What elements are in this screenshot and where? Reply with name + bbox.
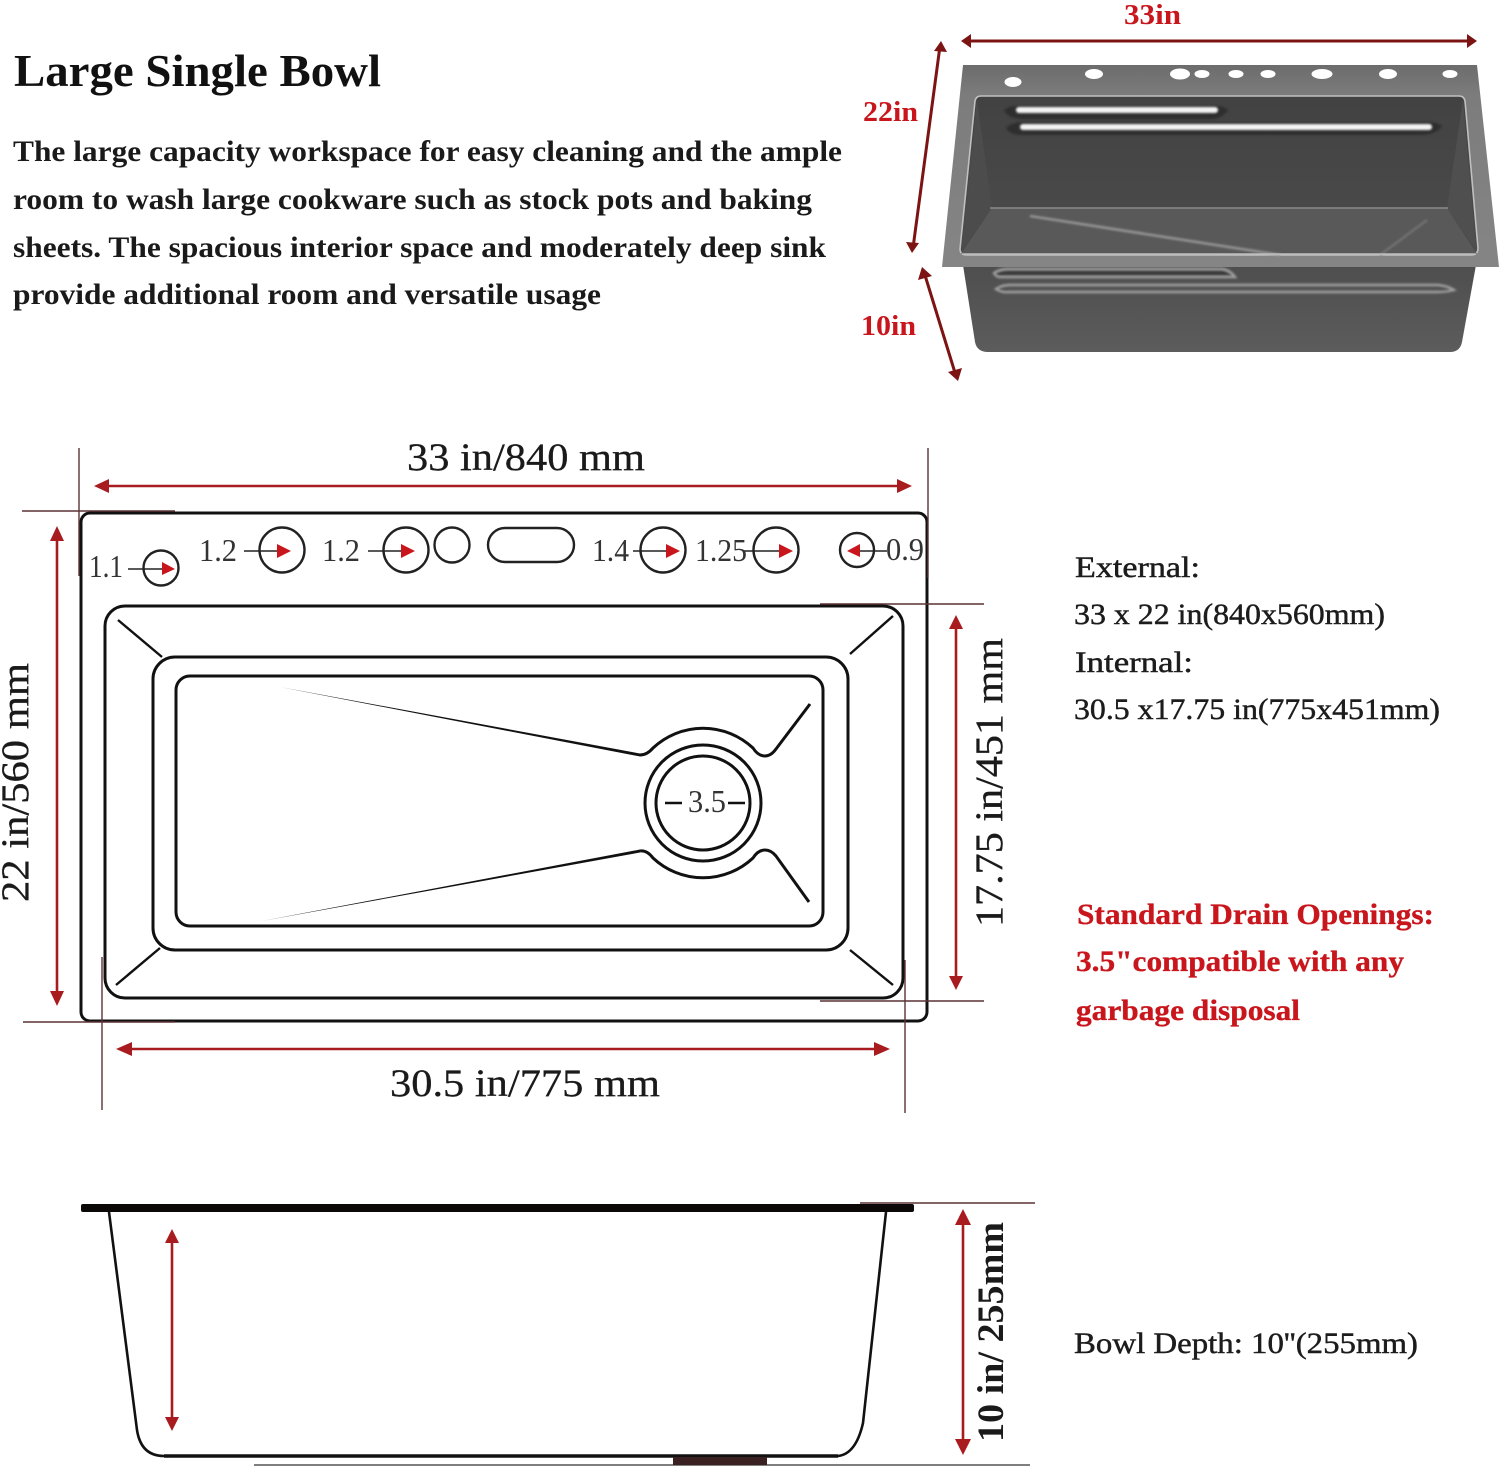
rim bowl outline [105, 606, 903, 998]
drain circles [645, 745, 761, 861]
arrow: inner depth [165, 1229, 179, 1431]
text block: external and internal size [1074, 551, 1440, 726]
top flange [81, 1204, 914, 1212]
sink outer body [963, 265, 1476, 352]
text block: description [13, 135, 842, 311]
text block: drain openings: Standard Drain Openings: [1077, 898, 1434, 931]
text block: external and internal size: External: [1075, 551, 1200, 584]
sink faucet holes [1004, 68, 1458, 87]
label: 22in: 22in [863, 96, 918, 128]
drain label 3.5: 3.5 [688, 783, 726, 819]
arrow: top width [94, 479, 912, 493]
text block: external and internal size: 33 x 22 in(840x560mm) [1074, 598, 1385, 631]
text block: description: sheets. The spacious interior space and moderately deep sink [13, 231, 826, 264]
outer outline [81, 513, 927, 1021]
text block: description: room to wash large cookware such as stock pots and baking [13, 183, 812, 216]
text block: external and internal size: Internal: [1075, 646, 1193, 679]
text block: bowl depth: Bowl Depth: 10''(255mm) [1074, 1327, 1418, 1360]
hole 1.1: 1.1 [89, 548, 123, 584]
sink top rim [942, 65, 1499, 267]
top view drawing [81, 513, 927, 1021]
plain hole [434, 528, 470, 562]
arrow: right height [949, 615, 963, 990]
text block: drain openings: garbage disposal [1076, 994, 1300, 1027]
sink floor back edge [990, 207, 1448, 209]
hole 0.9 [840, 531, 924, 567]
bowl profile [109, 1212, 886, 1456]
text block: external and internal size: 30.5 x17.75 in(775x451mm) [1074, 693, 1440, 726]
hole 1.4: 1.4 [592, 532, 629, 568]
label: 10in: 10in [861, 310, 916, 342]
text block: drain openings [1076, 898, 1434, 1027]
sink inner slots [1004, 106, 1442, 135]
arrow: 33in width [961, 34, 1477, 48]
side view drawing [81, 1204, 914, 1465]
hole 1.25 [695, 528, 798, 572]
hole 1.2 right [322, 528, 428, 572]
sink floor [961, 208, 1477, 254]
label: 10 in/ 255mm: 10 in/ 255mm [971, 1222, 1012, 1442]
bowl floor outline [176, 676, 823, 926]
arrow: bottom width [116, 1042, 890, 1056]
label: 33 in/840 mm: 33 in/840 mm [407, 436, 645, 479]
hole 1.4 [592, 528, 686, 572]
hole 1.2 left: 1.2 [199, 532, 237, 568]
text block: description: The large capacity workspace for easy cleaning and the ample [13, 135, 842, 168]
hole 1.25: 1.25 [695, 532, 747, 568]
label: 17.75 in/451 mm: 17.75 in/451 mm [968, 638, 1011, 927]
sink floor ridges [1030, 216, 1427, 255]
drain arcs and creases [262, 687, 810, 921]
sink basin [960, 96, 1478, 255]
title: Large Single Bowl [14, 46, 381, 96]
text block: description: provide additional room and versatile usage [13, 278, 601, 311]
extension lines [22, 448, 1035, 1465]
hole 0.9: 0.9 [886, 531, 924, 567]
hole 1.2 left [199, 528, 304, 572]
arrow: 10in [918, 267, 962, 381]
arrow: left height [50, 526, 64, 1006]
label: 30.5 in/775 mm: 30.5 in/775 mm [390, 1062, 660, 1105]
text block: drain openings: 3.5"compatible with any [1076, 945, 1404, 978]
sink photo illustration [942, 65, 1499, 352]
sink front edge highlight [962, 253, 1476, 255]
drain label 3.5 [665, 783, 745, 819]
middle step outline [153, 657, 848, 950]
hole 1.2 right: 1.2 [322, 532, 360, 568]
sink body slots [994, 269, 1454, 292]
arrow: bowl depth [955, 1209, 971, 1455]
hole 1.1 [89, 548, 178, 586]
drain stub [673, 1457, 767, 1465]
bottom line thickening [164, 1454, 838, 1458]
corner creases [116, 616, 893, 985]
sink side walls [962, 100, 1476, 250]
arrow: 22in [906, 41, 947, 253]
oval slot [488, 528, 574, 562]
